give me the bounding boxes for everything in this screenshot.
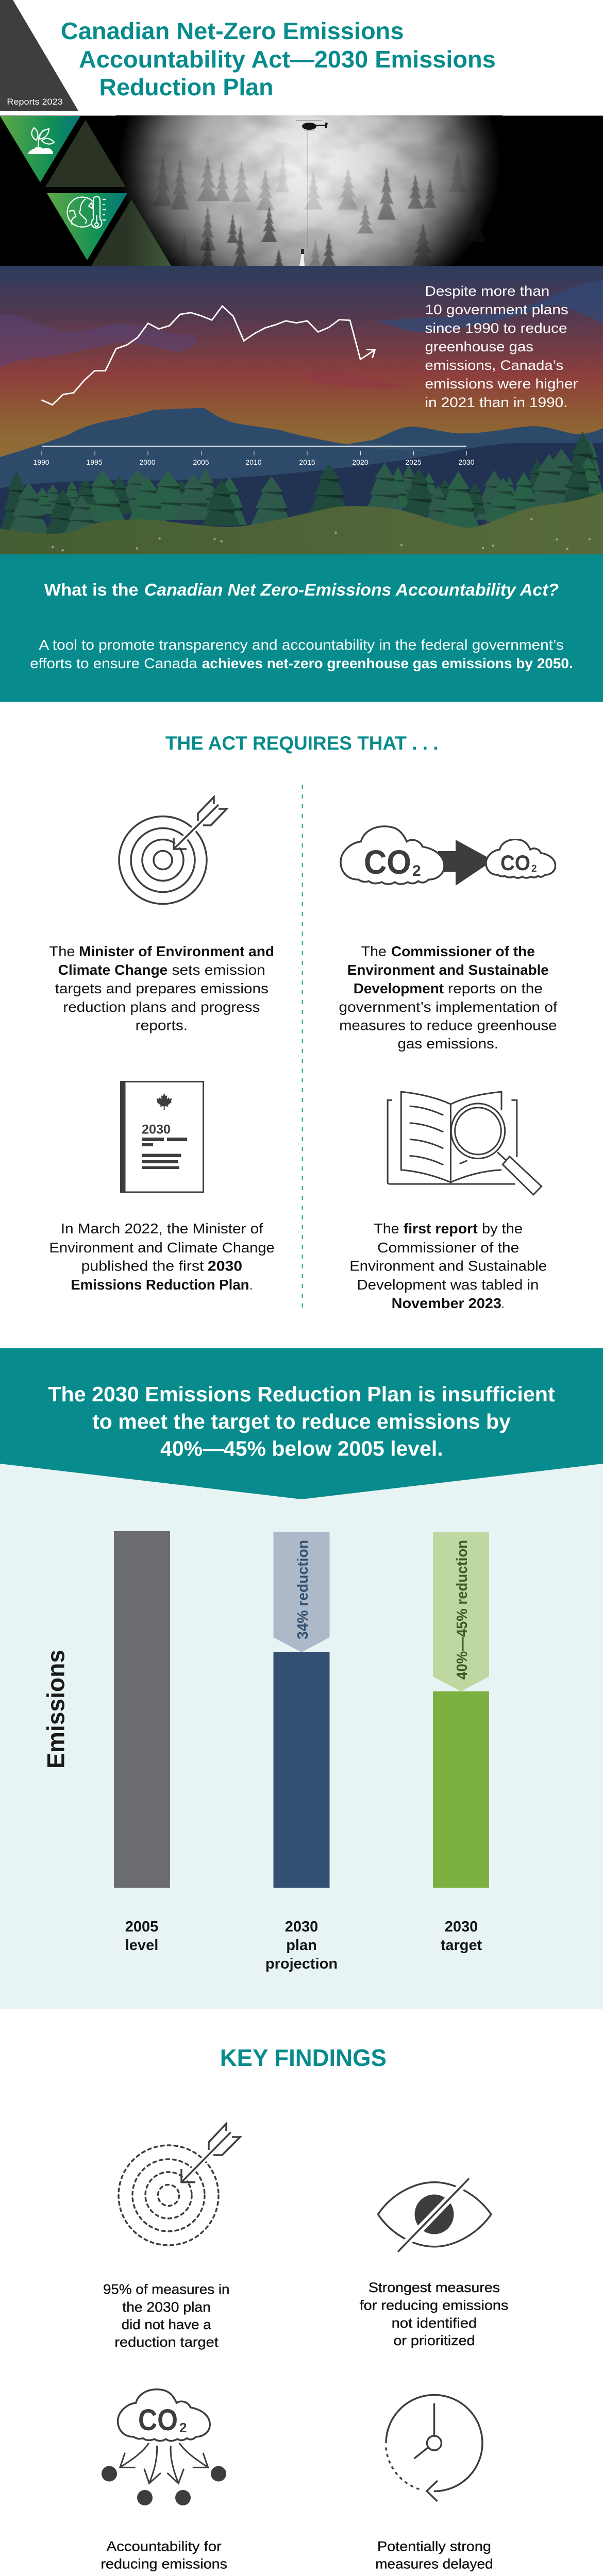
text: first plan: published the first <box>81 1259 204 1274</box>
icon: sprout <box>29 128 54 154</box>
text: finding delayed measures: Potentially strong <box>377 2539 491 2554</box>
timeline axis: 2030 <box>458 458 475 466</box>
icon: co2 reduction <box>341 826 556 886</box>
bar: 2005 level <box>114 1531 170 1954</box>
axis label: Emissions <box>42 1650 70 1769</box>
bar: 2030 target: target <box>441 1937 482 1954</box>
callout text: since 1990 to reduce <box>425 320 567 336</box>
icon: co2 cloud with fragmented arrows <box>102 2389 226 2505</box>
text: finding strongest measures: or prioritized <box>393 2333 475 2348</box>
sunset chart panel <box>0 266 603 554</box>
icon: globe thermometer <box>68 197 106 228</box>
line chart: emissions 1990-2021 <box>42 306 375 405</box>
text: first report: The <box>374 1221 399 1237</box>
small cloud <box>486 839 556 878</box>
text: finding 95 percent <box>103 2282 229 2350</box>
bar: 2030 plan projection: 34% reduction <box>295 1540 311 1639</box>
heading: to meet the target to reduce emissions by <box>92 1410 511 1433</box>
timeline axis: 1995 <box>86 458 103 466</box>
water bucket and drop <box>299 249 305 266</box>
heading: The 2030 Emissions Reduction Plan is insufficient <box>48 1382 555 1406</box>
text: minister: Minister of Environment and <box>79 944 274 960</box>
text: minister <box>49 944 274 1033</box>
text: first plan <box>49 1221 275 1293</box>
heading: key findings: KEY FINDINGS <box>220 2044 387 2071</box>
triangle: globe and thermometer icon <box>47 193 127 260</box>
icon: crossed-out eye <box>378 2179 491 2251</box>
text: first plan: 2030 <box>208 1259 242 1274</box>
text: first plan: . <box>249 1277 253 1293</box>
text: finding delayed measures <box>375 2539 493 2571</box>
callout text: emissions, Canada’s <box>425 358 563 374</box>
panel: what is the act <box>0 554 603 702</box>
timeline axis <box>33 446 475 466</box>
text: first plan: In March 2022, the Minister of <box>61 1221 263 1237</box>
title: Accountability Act—2030 Emissions <box>79 46 496 73</box>
icon: 2030 plan document: 2030 <box>142 1122 171 1137</box>
text: minister: targets and prepares emissions <box>55 981 269 997</box>
text: minister: sets emission <box>172 962 265 978</box>
text: first report <box>349 1221 547 1312</box>
callout text <box>425 283 578 411</box>
heading: 40%—45% below 2005 level. <box>160 1436 443 1461</box>
helicopter <box>296 120 328 248</box>
timeline axis: 2025 <box>405 458 422 466</box>
dark triangle with green tint <box>91 199 171 266</box>
timeline axis: 1990 <box>33 458 49 466</box>
text: minister: reports. <box>136 1018 188 1033</box>
foreground hills <box>0 492 603 554</box>
icon: co2 cloud with fragmented arrows: 2 <box>179 2420 187 2435</box>
photo panel: helicopter over smoky forest <box>0 115 603 266</box>
text: commissioner: Environment and Sustainable <box>347 962 549 978</box>
text: commissioner: Development <box>354 981 444 997</box>
text: finding 95 percent: 95% of measures in <box>103 2282 229 2297</box>
text: finding accountability <box>100 2539 227 2576</box>
fog glow <box>116 115 502 266</box>
clouds <box>0 280 603 388</box>
series label: Reports 2023 <box>7 97 63 107</box>
bar: 2030 plan projection: plan <box>286 1937 317 1954</box>
forest <box>0 431 603 534</box>
bar: 2030 plan projection <box>265 1532 338 1972</box>
text: commissioner: Commissioner of the <box>391 944 535 960</box>
definition text: achieves net-zero greenhouse gas emissions by 2050. <box>202 656 573 672</box>
text: finding strongest measures: Strongest measures <box>368 2280 500 2295</box>
bar: 2030 target <box>433 1532 489 1954</box>
title <box>61 18 496 100</box>
timeline axis: 2020 <box>352 458 368 466</box>
panel: plan is insufficient <box>0 1348 603 2009</box>
definition text: efforts to ensure Canada <box>30 656 197 672</box>
heading: the act requires: THE ACT REQUIRES THAT . . . <box>165 732 439 754</box>
text: finding strongest measures <box>360 2280 508 2348</box>
text: first plan: Environment and Climate Change <box>49 1240 275 1256</box>
text: commissioner: measures to reduce greenhouse <box>339 1018 557 1033</box>
text: finding strongest measures: not identified <box>392 2315 477 2331</box>
text: first report: . <box>501 1296 505 1312</box>
text: first report: Environment and Sustainable <box>349 1259 547 1274</box>
large cloud: CO <box>364 843 411 881</box>
bar: 2030 plan projection: 2030 <box>285 1919 318 1935</box>
timeline axis: 2015 <box>299 458 315 466</box>
callout text: 10 government plans <box>425 302 568 318</box>
text: finding accountability: reducing emissions <box>100 2556 227 2571</box>
bar: 2030 plan projection: projection <box>265 1956 338 1972</box>
text: finding 95 percent: did not have a <box>122 2317 211 2332</box>
arrow <box>438 840 493 886</box>
mountains <box>0 408 603 554</box>
text: first report: first report <box>404 1221 478 1237</box>
text: first report: Commissioner of the <box>377 1240 519 1256</box>
dark corner triangle <box>0 0 78 111</box>
small cloud: 2 <box>531 863 537 874</box>
callout text: Despite more than <box>425 283 549 299</box>
large cloud: 2 <box>412 862 421 879</box>
text: commissioner: government’s implementation of <box>339 999 558 1015</box>
text: finding 95 percent: the 2030 plan <box>122 2299 211 2315</box>
text: finding delayed measures: measures delayed <box>375 2556 493 2571</box>
bar chart <box>42 1531 489 1972</box>
dark triangle <box>45 120 126 187</box>
maple leaf <box>157 1093 172 1110</box>
small cloud: CO <box>500 851 530 875</box>
icon: target with arrow <box>119 797 227 904</box>
forest silhouettes <box>154 151 486 266</box>
callout text: emissions were higher <box>425 376 578 392</box>
text: commissioner: The <box>361 944 387 960</box>
text: first plan: Emissions Reduction Plan <box>71 1277 249 1293</box>
triangle: plant icon <box>0 116 80 182</box>
text: minister: Climate Change <box>58 962 167 978</box>
bar: 2005 level: level <box>125 1937 158 1954</box>
text: commissioner: reports on the <box>448 981 543 997</box>
heading <box>48 1382 555 1461</box>
header panel <box>0 0 496 111</box>
text: minister: The <box>49 944 75 960</box>
text: finding accountability: Accountability for <box>107 2539 222 2554</box>
definition text <box>30 637 573 672</box>
definition text: A tool to promote transparency and accountability in the federal government’s <box>39 637 564 653</box>
text: first report: Development was tabled in <box>357 1277 539 1293</box>
text: finding strongest measures: for reducing emissions <box>360 2298 508 2313</box>
text: first report: November 2023 <box>392 1296 501 1312</box>
large cloud <box>341 826 444 884</box>
question heading: Canadian Net Zero-Emissions Accountability Act? <box>144 581 559 600</box>
question heading: What is the <box>44 581 139 600</box>
bar: 2005 level: 2005 <box>125 1919 158 1935</box>
text: first report: by the <box>482 1221 523 1237</box>
text: commissioner <box>339 944 558 1052</box>
icon: co2 cloud with fragmented arrows: CO <box>138 2403 178 2437</box>
text: commissioner: gas emissions. <box>398 1036 498 1052</box>
text: minister: reduction plans and progress <box>63 999 260 1015</box>
timeline axis: 2005 <box>193 458 209 466</box>
text: finding 95 percent: reduction target <box>114 2334 219 2350</box>
timeline axis: 2010 <box>245 458 262 466</box>
title: Reduction Plan <box>99 74 274 100</box>
callout text: greenhouse gas <box>425 339 533 355</box>
question heading <box>44 581 559 600</box>
callout text: in 2021 than in 1990. <box>425 395 567 411</box>
bar: 2030 target: 2030 <box>445 1919 478 1935</box>
icon: dashed target with arrow <box>119 2124 240 2245</box>
title: Canadian Net-Zero Emissions <box>61 18 404 44</box>
bar: 2030 target: 40%—45% reduction <box>454 1540 471 1680</box>
icon: report and magnifier <box>388 1092 542 1195</box>
icon: delayed clock <box>386 2395 482 2501</box>
icon: 2030 plan document <box>120 1081 203 1193</box>
timeline axis: 2000 <box>139 458 156 466</box>
